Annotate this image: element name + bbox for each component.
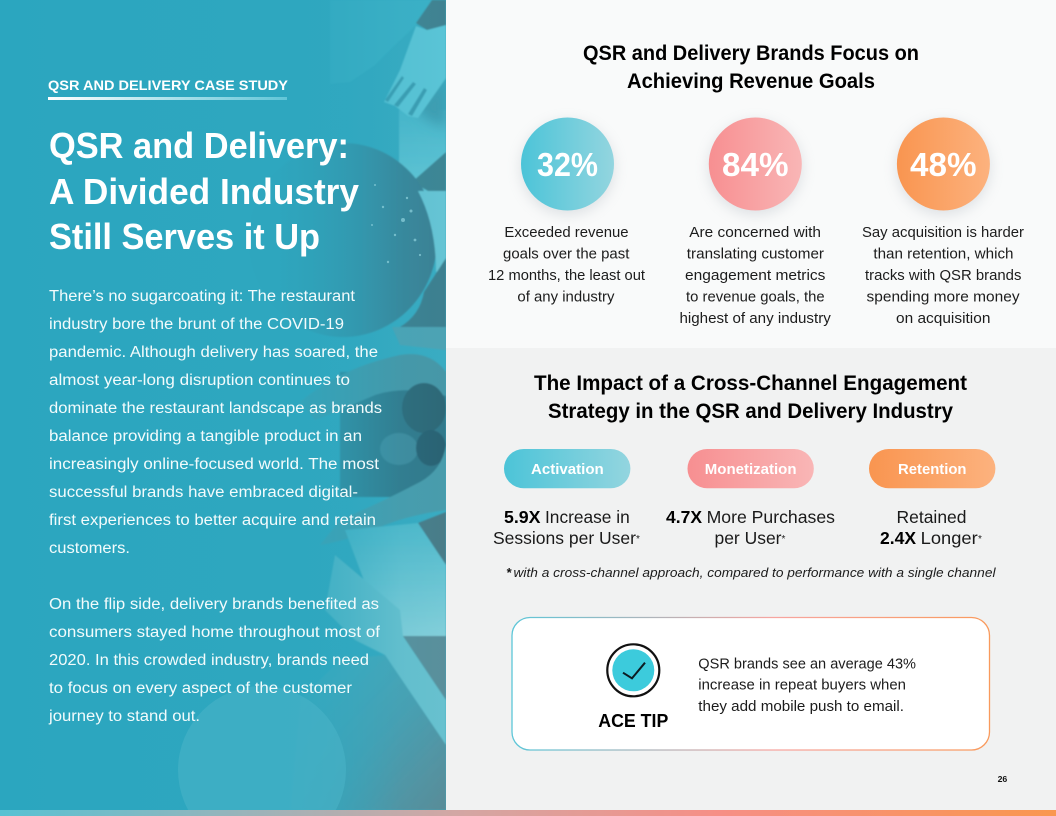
- stat: 48%: than retention, which: [873, 246, 1014, 262]
- footnote: with a cross-channel approach, compared to performance with a single channel: [514, 565, 997, 580]
- metric: purchases per user: [666, 507, 835, 548]
- title: QSR and Delivery:: [49, 125, 349, 166]
- metric: sessions per user: Sessions per User: [493, 528, 636, 548]
- metric: sessions per user: [493, 507, 640, 548]
- metric: purchases per user: More Purchases: [707, 507, 835, 527]
- stat: 84%: to revenue goals, the: [686, 290, 825, 306]
- title: [49, 125, 359, 257]
- pill: monetization: [688, 449, 814, 488]
- heading: case study eyebrow: [48, 78, 288, 100]
- callout: ace tip card: ACE TIP: [598, 711, 668, 731]
- text block: intro paragraph: almost year-long disruption continues to: [49, 372, 350, 389]
- stat: 48%: Say acquisition is harder: [862, 225, 1024, 241]
- text block: second paragraph: [48, 596, 381, 725]
- stat: 84%: highest of any industry: [680, 311, 832, 327]
- stat: 84%: engagement metrics: [685, 268, 825, 284]
- text block: intro paragraph: industry bore the brunt of the COVID-19: [49, 316, 344, 333]
- pill: retention: Retention: [898, 462, 966, 478]
- panel: left teal photo panel: [0, 0, 446, 816]
- title: Still Serves it Up: [49, 216, 320, 257]
- stat: 48%: 48%: [910, 146, 976, 183]
- text block: intro paragraph: [49, 288, 382, 557]
- stat: 84%: translating customer: [687, 246, 824, 262]
- footnote: *: [507, 565, 513, 580]
- stat: 32%: Exceeded revenue: [504, 225, 629, 241]
- stat: 32%: of any industry: [517, 290, 615, 306]
- stat: 84%: [680, 118, 832, 327]
- lower section background: [446, 348, 1056, 816]
- title: A Divided Industry: [49, 171, 359, 212]
- text block: tip: QSR brands see an average 43%: [698, 656, 916, 672]
- right page background: [446, 0, 1056, 348]
- heading: cross-channel impact: [534, 372, 967, 423]
- metric: retained longer: Retained: [896, 507, 966, 527]
- stat: 32%: [488, 118, 645, 306]
- heading: revenue goals: QSR and Delivery Brands Focus on: [583, 42, 919, 65]
- text block: second paragraph: consumers stayed home throughout most of: [49, 624, 381, 641]
- callout: ace tip card: [512, 618, 990, 750]
- text block: tip: they add mobile push to email.: [698, 699, 904, 715]
- stat: 84%: 84%: [722, 146, 788, 183]
- heading: case study eyebrow: QSR AND DELIVERY CASE STUDY: [48, 78, 288, 93]
- metric: retained longer: Longer: [921, 528, 978, 548]
- pill: retention: [869, 449, 995, 488]
- text block: intro paragraph: There’s no sugarcoating it: The restaurant: [49, 288, 356, 305]
- stat: 84%: Are concerned with: [689, 225, 821, 241]
- metric: sessions per user: Increase in: [545, 507, 630, 527]
- bowl: [178, 686, 346, 816]
- page number: 26: [998, 774, 1008, 784]
- text block: tip: increase in repeat buyers when: [698, 678, 906, 694]
- heading: cross-channel impact: Strategy in the QSR and Delivery Industry: [548, 400, 953, 423]
- metric: sessions per user: *: [636, 534, 640, 545]
- text block: intro paragraph: pandemic. Although delivery has soared, the: [49, 344, 378, 361]
- text block: second paragraph: journey to stand out.: [48, 708, 200, 725]
- stat: 48%: tracks with QSR brands: [865, 268, 1021, 284]
- bottom gradient bar: [0, 810, 1056, 816]
- metric: retained longer: [880, 507, 982, 548]
- metric: retained longer: *: [978, 534, 982, 545]
- text block: intro paragraph: dominate the restaurant landscape as brands: [49, 400, 382, 417]
- bread speckle: [371, 184, 421, 263]
- stat: 32%: 12 months, the least out: [488, 268, 645, 284]
- pill: activation: [504, 449, 630, 488]
- text block: intro paragraph: first experiences to better acquire and retain: [49, 512, 376, 529]
- text block: intro paragraph: balance providing a tangible product in an: [49, 428, 362, 445]
- text block: intro paragraph: successful brands have embraced digital-: [49, 484, 358, 501]
- stat: 48%: on acquisition: [896, 311, 990, 327]
- stat: 32%: goals over the past: [503, 246, 629, 262]
- metric: purchases per user: 4.7X: [666, 507, 702, 527]
- metric: purchases per user: *: [782, 534, 786, 545]
- heading: revenue goals: Achieving Revenue Goals: [627, 70, 875, 93]
- text block: intro paragraph: customers.: [49, 540, 130, 557]
- heading: cross-channel impact: The Impact of a Cross-Channel Engagement: [534, 372, 967, 395]
- metric: retained longer: 2.4X: [880, 528, 916, 548]
- text block: second paragraph: to focus on every aspect of the customer: [49, 680, 352, 697]
- text block: second paragraph: On the flip side, delivery brands benefited as: [49, 596, 379, 613]
- text block: tip: [698, 656, 916, 715]
- heading: revenue goals: [583, 42, 919, 93]
- stat: 48%: spending more money: [866, 290, 1020, 306]
- metric: purchases per user: per User: [714, 528, 782, 548]
- stat: 32%: 32%: [537, 146, 598, 183]
- text block: second paragraph: 2020. In this crowded industry, brands need: [49, 652, 369, 669]
- text block: intro paragraph: increasingly online-focused world. The most: [49, 456, 380, 473]
- metric: sessions per user: 5.9X: [504, 507, 541, 527]
- stat: 48%: [862, 118, 1024, 327]
- pill: monetization: Monetization: [705, 462, 796, 478]
- pill: activation: Activation: [531, 462, 604, 478]
- icon: check mark badge: [607, 644, 659, 696]
